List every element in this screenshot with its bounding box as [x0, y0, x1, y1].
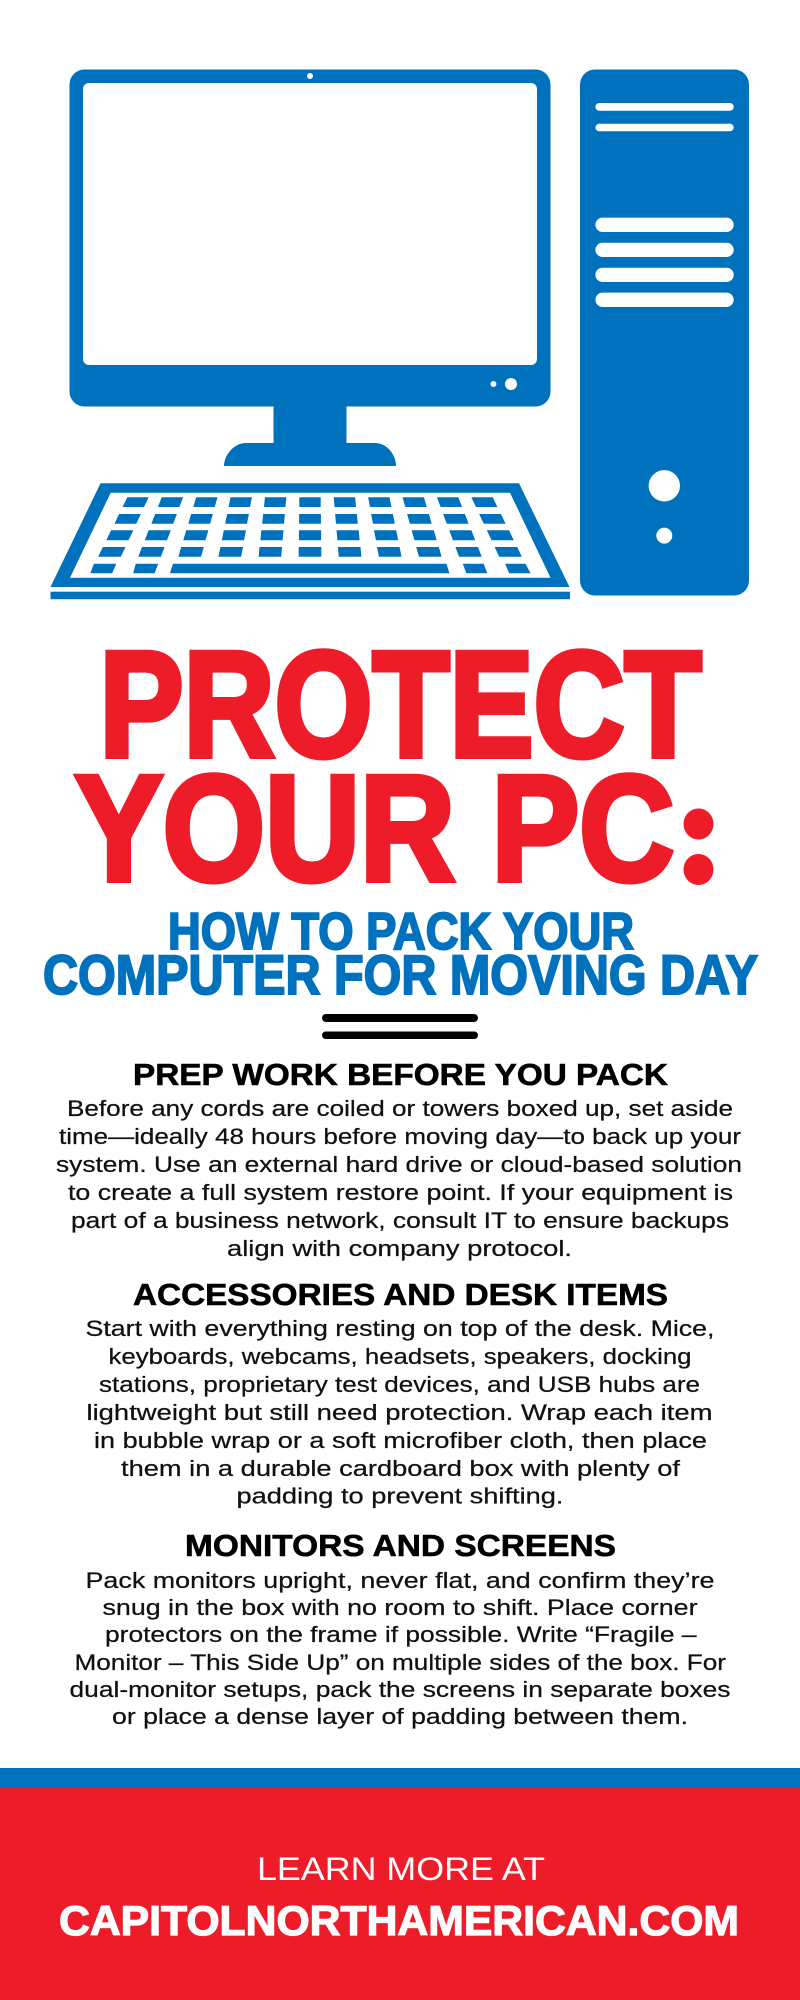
- text block: accessories body: lightweight but still need protection. Wrap each item: [86, 1400, 712, 1425]
- section: prep work before you pack: [56, 1057, 742, 1261]
- divider: double rule: [322, 1014, 478, 1039]
- icon: desktop computer: [50, 70, 749, 599]
- text block: prep work body: system. Use an external hard drive or cloud-based solution: [56, 1152, 742, 1177]
- text block: accessories body: in bubble wrap or a soft microfiber cloth, then place: [94, 1428, 707, 1453]
- text block: accessories body: stations, proprietary test devices, and USB hubs are: [99, 1372, 700, 1397]
- text block: monitors body: dual-monitor setups, pack the screens in separate boxes: [70, 1677, 731, 1702]
- text block: monitors body: protectors on the frame if possible. Write “Fragile –: [105, 1622, 697, 1647]
- text block: prep work body: to create a full system restore point. If your equipment is: [68, 1180, 733, 1205]
- heading: accessories: ACCESSORIES AND DESK ITEMS: [133, 1277, 668, 1312]
- band: blue stripe: [0, 1768, 800, 1788]
- text block: monitors body: snug in the box with no room to shift. Place corner: [102, 1595, 698, 1620]
- title: [75, 620, 718, 912]
- icon: computer tower: [580, 70, 749, 596]
- heading: monitors: MONITORS AND SCREENS: [185, 1528, 616, 1563]
- text block: accessories body: them in a durable cardboard box with plenty of: [121, 1456, 681, 1481]
- text block: prep work body: Before any cords are coiled or towers boxed up, set aside: [67, 1096, 733, 1121]
- text block: monitors body: Monitor – This Side Up” on multiple sides of the box. For: [74, 1650, 726, 1675]
- heading: prep work: PREP WORK BEFORE YOU PACK: [133, 1057, 669, 1092]
- text block: accessories body: Start with everything resting on top of the desk. Mice,: [86, 1316, 714, 1341]
- text block: prep work body: part of a business network, consult IT to ensure backups: [71, 1208, 729, 1233]
- text block: monitors body: or place a dense layer of padding between them.: [112, 1704, 688, 1729]
- text block: prep work body: [56, 1096, 742, 1261]
- icon: keyboard: [50, 483, 570, 599]
- section: monitors and screens: [70, 1528, 731, 1729]
- text block: monitors body: Pack monitors upright, never flat, and confirm they’re: [86, 1568, 714, 1593]
- text block: accessories body: [86, 1316, 714, 1508]
- text block: prep work body: time—ideally 48 hours before moving day—to back up your: [59, 1124, 741, 1149]
- title: YOUR PC:: [75, 744, 718, 912]
- icon: monitor: [70, 70, 550, 466]
- section: accessories and desk items: [86, 1277, 714, 1508]
- text block: accessories body: padding to prevent shifting.: [236, 1484, 564, 1508]
- title: PROTECT: [100, 620, 702, 788]
- footer text: learn more: LEARN MORE AT: [257, 1851, 545, 1887]
- text block: accessories body: keyboards, webcams, headsets, speakers, docking: [108, 1344, 692, 1369]
- subtitle: [43, 903, 758, 1006]
- subtitle: HOW TO PACK YOUR: [168, 903, 634, 961]
- footer text: website: CAPITOLNORTHAMERICAN.COM: [59, 1897, 739, 1944]
- text block: prep work body: align with company protocol.: [227, 1236, 572, 1261]
- footer panel: [0, 1788, 800, 2000]
- text block: monitors body: [70, 1568, 731, 1729]
